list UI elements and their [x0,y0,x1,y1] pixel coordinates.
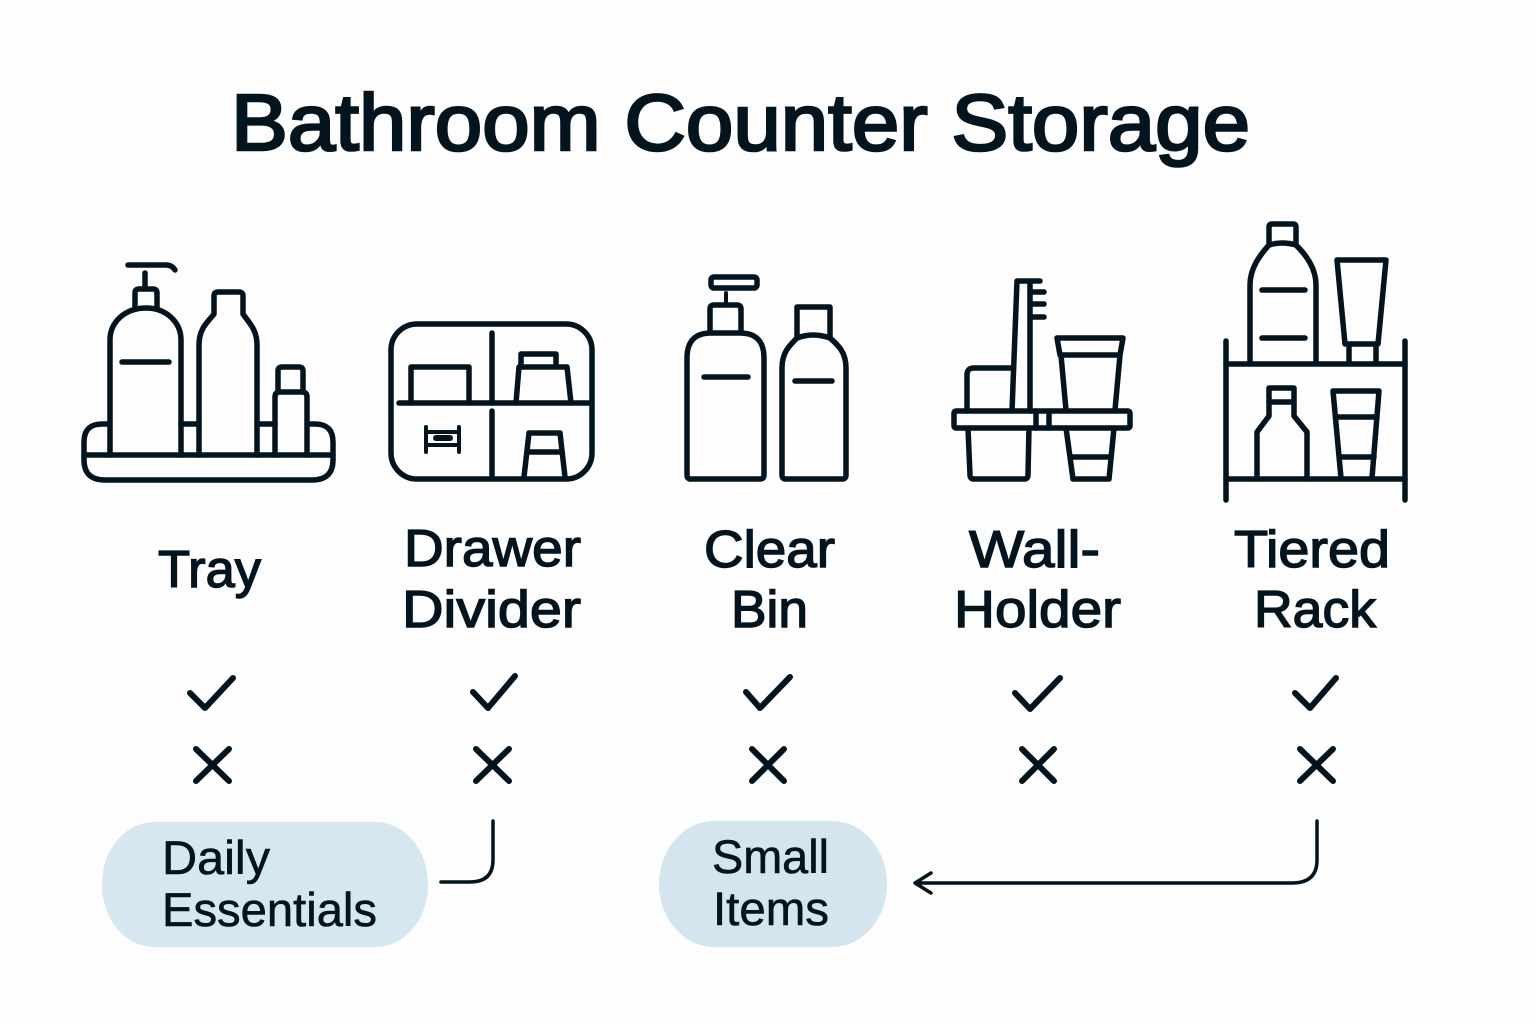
label: Wall-Holder [954,521,1121,639]
callout: Daily Essentials [102,822,428,947]
label: Drawer Divider: Divider [402,581,581,639]
title: Bathroom Counter Storage [231,78,1250,167]
label: Drawer Divider [402,520,581,639]
label: Wall-Holder: Holder [954,581,1121,639]
label: Tiered Rack: Tiered [1234,521,1390,579]
label: Clear Bin [704,521,835,639]
check marks row [190,676,1336,709]
label: Tray: Tray [158,541,261,599]
callout: Small Items: Small [712,830,829,883]
cross marks row [196,749,1333,781]
label: Clear Bin: Clear [704,521,835,579]
icon: tray with bottles [84,265,333,480]
icon: clear bin bottles [687,277,846,479]
callout: Daily Essentials: Essentials [162,883,377,936]
label: Wall-Holder: Wall- [969,521,1100,579]
icon: tiered rack [1226,224,1405,500]
label: Tiered Rack [1234,521,1390,639]
icon: drawer divider [391,324,592,479]
callout: Small Items: Items [713,882,829,935]
callout: Small Items [659,821,887,947]
arrow: tiered rack to small items [915,821,1317,893]
label: Clear Bin: Bin [731,581,808,639]
callout: Daily Essentials: Daily [162,831,271,884]
arrow: drawer divider to daily essentials [441,821,493,882]
label: Drawer Divider: Drawer [404,520,581,578]
label: Tiered Rack: Rack [1254,581,1377,639]
icon: wall holder [954,281,1130,479]
